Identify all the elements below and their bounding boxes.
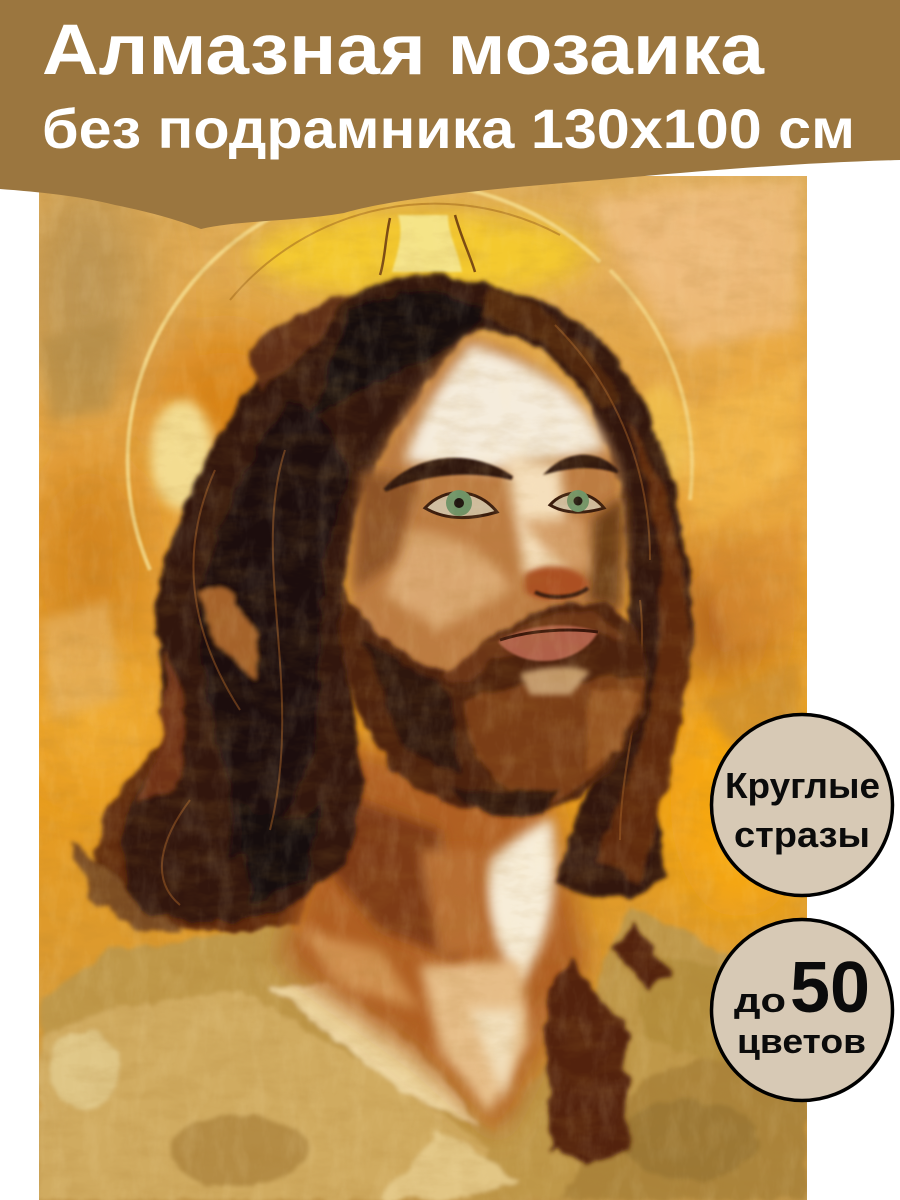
beard [340,590,647,815]
eyes and brows [385,456,618,518]
painting background [25,176,820,1200]
halo [128,183,692,570]
badge: round rhinestones [712,714,892,896]
neck and chest [280,740,590,1135]
hair [122,275,692,922]
header banner [0,0,900,229]
subtitle: без подрамника 130х100 см [42,97,855,160]
lips [498,625,598,695]
robe [39,905,807,1200]
hair strands [162,325,650,905]
badge: up to 50 colours: 50 [790,948,870,1028]
title: Алмазная мозаика [42,11,765,90]
dark shoulder behind hair [69,741,310,936]
robe ties [545,925,672,1165]
brush texture overlay [39,176,807,1200]
badge: round rhinestones: Круглые [725,765,880,806]
nose [525,566,590,600]
badge: up to 50 colours [712,920,892,1100]
painting: portrait on golden background [25,176,820,1200]
face [349,335,626,740]
badge: up to 50 colours: цветов [737,1023,866,1061]
badge: round rhinestones: стразы [734,814,870,855]
badge: up to 50 colours: до [734,982,786,1020]
